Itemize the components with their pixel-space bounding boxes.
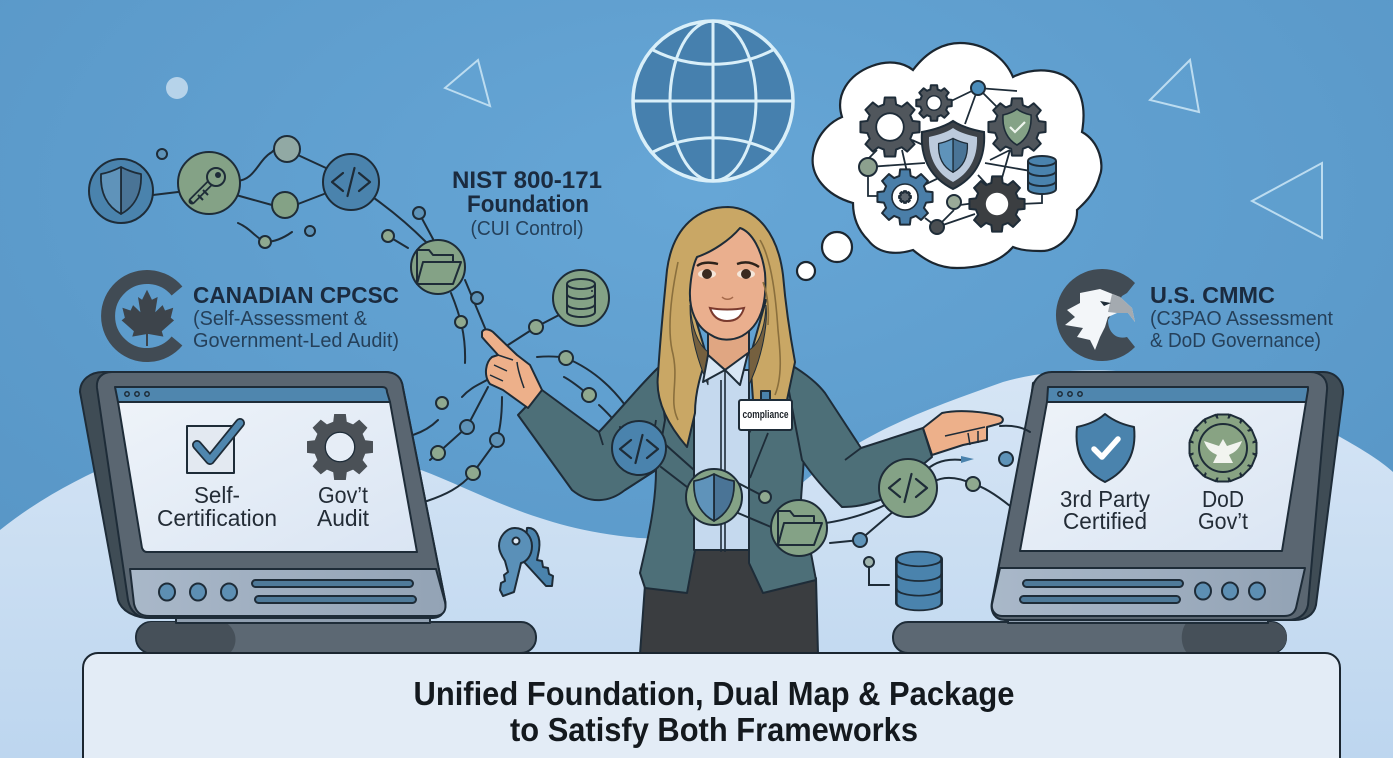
- folder circle green: [771, 500, 827, 556]
- key circle: [178, 152, 240, 214]
- code circle blue: [612, 421, 666, 475]
- hair shadow: [690, 305, 766, 385]
- label: self-certification: Certification: [157, 505, 277, 531]
- face: [690, 228, 765, 340]
- heading: U.S. CMMC: (C3PAO Assessment: [1150, 308, 1333, 330]
- gear blue: [877, 169, 933, 225]
- mouth: [710, 308, 744, 321]
- jacket creases: [599, 420, 861, 478]
- hinge: [176, 614, 430, 623]
- screen: [1020, 402, 1306, 551]
- label: DoD gov't: DoD: [1202, 486, 1244, 512]
- title: to Satisfy Both Frameworks: [510, 711, 918, 748]
- label: 3rd party certified: 3rd Party: [1060, 486, 1150, 512]
- base: [136, 622, 536, 653]
- frame: [992, 372, 1327, 620]
- cloud outline: [813, 43, 1101, 268]
- pants: [640, 550, 818, 654]
- pointing right hand: [923, 411, 1003, 455]
- U.S. logo: [1056, 269, 1135, 361]
- shield circle green: [686, 469, 742, 525]
- heading: Canadian CPCSC: [193, 282, 399, 352]
- decorative circle: [166, 77, 188, 99]
- left arm: [518, 367, 665, 500]
- folder circle: [411, 240, 465, 294]
- hair: [658, 207, 795, 447]
- icon: checkbox: [187, 423, 240, 473]
- cloud bubble medium: [822, 232, 852, 262]
- node gray: [274, 136, 300, 162]
- label: DoD gov't: [1198, 486, 1249, 534]
- connecting lines: [153, 150, 625, 501]
- screen: [118, 402, 417, 552]
- thought cloud: [797, 43, 1101, 280]
- heading: NIST foundation: NIST 800-171: [452, 167, 602, 194]
- buttons: [1195, 582, 1265, 600]
- shell: [80, 372, 445, 618]
- slots: [252, 580, 416, 603]
- title: Unified Foundation, Dual Map & Package: [414, 675, 1014, 712]
- central shield: [922, 121, 984, 189]
- badge: [739, 391, 792, 430]
- arrow tip: [961, 456, 974, 463]
- pointing left hand: [482, 329, 542, 408]
- gear small dark: [916, 85, 952, 121]
- control panel: [992, 568, 1305, 616]
- database: [1028, 156, 1056, 194]
- label: self-certification: Self-: [194, 482, 240, 508]
- base: [893, 622, 1287, 653]
- control panel: [130, 569, 445, 616]
- right arm: [783, 360, 932, 507]
- heading: NIST foundation: Foundation: [467, 191, 589, 218]
- shirt: [694, 370, 749, 550]
- jacket right panel: [749, 360, 816, 593]
- bottom panel: [83, 653, 1340, 758]
- jacket left panel: [599, 367, 695, 593]
- light hills: [0, 370, 1393, 758]
- node green: [272, 192, 298, 218]
- heading: NIST foundation: (CUI Control): [470, 218, 584, 240]
- gear with green shield: [988, 98, 1046, 156]
- slots: [1020, 580, 1183, 603]
- left laptop: [80, 372, 536, 653]
- network lines across jacket: [620, 421, 1030, 543]
- collar: [703, 353, 748, 385]
- gear black: [969, 176, 1025, 232]
- database circle: [553, 270, 609, 326]
- heading: Canadian CPCSC: CANADIAN CPCSC: [193, 282, 399, 308]
- icon: blue database: [896, 552, 942, 610]
- hinge: [1008, 614, 1268, 623]
- heading: Canadian CPCSC: (Self-Assessment &: [193, 308, 368, 330]
- gear large dark: [860, 97, 920, 157]
- presenter: [482, 207, 1030, 654]
- frame: [97, 372, 445, 618]
- heading: U.S. CMMC: U.S. CMMC: [1150, 282, 1275, 308]
- node with elbow line: [864, 557, 889, 585]
- neck: [708, 330, 749, 370]
- label: 3rd party certified: Certified: [1063, 508, 1147, 534]
- small nodes: [157, 149, 596, 480]
- shield circle: [89, 159, 153, 223]
- heading: U.S. CMMC: & DoD Governance): [1150, 330, 1321, 352]
- nodes: [859, 81, 985, 234]
- title: [414, 675, 1014, 748]
- label: 3rd party certified: [1060, 486, 1150, 534]
- hair strands: [670, 240, 780, 420]
- icon: keys: [499, 528, 553, 596]
- small nodes: [759, 452, 1013, 547]
- title bar: [115, 387, 390, 402]
- right laptop: [893, 372, 1343, 653]
- title bar: [1047, 387, 1308, 402]
- label: gov't audit: Gov’t: [318, 482, 369, 508]
- shell: [1005, 372, 1343, 620]
- code circle: [323, 154, 379, 210]
- label: gov't audit: [317, 482, 370, 531]
- icon: gear: [307, 414, 373, 480]
- cloud bubble small: [797, 262, 815, 280]
- label: gov't audit: Audit: [317, 505, 370, 531]
- icon: DoD seal: [1179, 404, 1267, 492]
- label: self-certification: [157, 482, 277, 531]
- heading: NIST foundation: [452, 167, 602, 240]
- badge: compliance: [742, 409, 788, 421]
- label: DoD gov't: Gov’t: [1198, 508, 1249, 534]
- brows and eyes: [697, 262, 759, 279]
- left network chain: [89, 136, 625, 501]
- decorative triangles: [445, 60, 1322, 238]
- code circle green: [879, 459, 937, 517]
- heading: U.S. CMMC: [1150, 282, 1333, 352]
- buttons: [159, 584, 237, 600]
- placket: [721, 370, 725, 552]
- heading: Canadian CPCSC: Government-Led Audit): [193, 330, 399, 352]
- icon: globe: [633, 21, 793, 181]
- Canadian logo: [108, 277, 177, 355]
- nose: [722, 297, 733, 299]
- network lines: [860, 88, 1042, 227]
- icon: shield check: [1077, 414, 1134, 482]
